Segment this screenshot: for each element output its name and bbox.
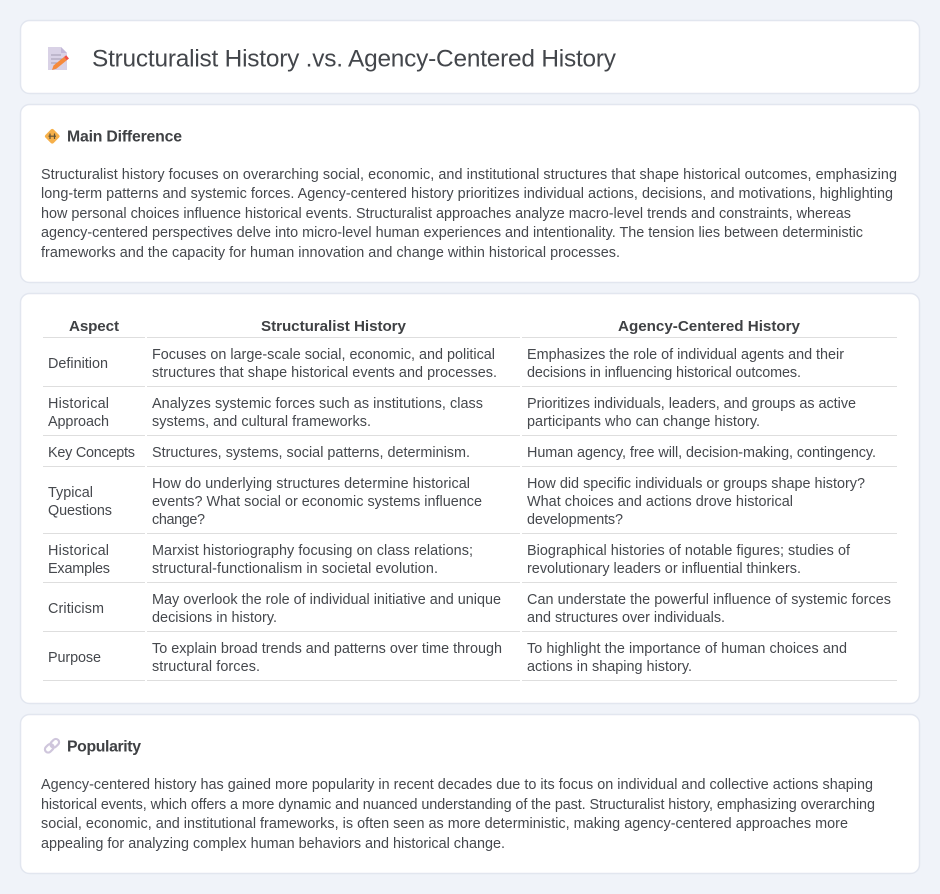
table row: historical examples: Examples xyxy=(48,561,110,577)
table row: historical examples: Biographical histories of notable figures; studies of xyxy=(527,543,851,559)
text block: main difference paragraph: long-term patterns and systemic forces. Agency-centered history prioritizes individual actions, decisions, and motivations, highlighting xyxy=(41,186,893,202)
table row: historical approach xyxy=(43,396,897,436)
table row: criticism: and structures over individuals. xyxy=(527,610,725,626)
text block: popularity paragraph: appealing for analyzing complex human behaviors and historical change. xyxy=(41,836,505,852)
table row: historical approach: Historical xyxy=(48,396,109,412)
table row: historical examples: Historical xyxy=(48,543,109,559)
table row: historical approach: participants who can change history. xyxy=(527,414,760,430)
title: Structuralist History .vs. Agency-Centered History xyxy=(92,46,617,72)
table row: criticism: May overlook the role of individual initiative and unique xyxy=(152,592,501,608)
table row: typical questions: change? xyxy=(152,512,205,528)
table row: purpose: actions in shaping history. xyxy=(527,659,692,675)
table row: definition: structures that shape historical events and processes. xyxy=(152,365,497,381)
table row: historical approach: Prioritizes individuals, leaders, and groups as active xyxy=(527,396,856,412)
table row: typical questions: Questions xyxy=(48,503,112,519)
heading: popularity: Popularity xyxy=(67,738,141,756)
table row: typical questions: How did specific individuals or groups shape history? xyxy=(527,476,865,492)
table row: historical examples: revolutionary leaders or influential thinkers. xyxy=(527,561,801,577)
icon: chain link xyxy=(44,738,60,754)
table row: typical questions xyxy=(43,476,897,534)
table row: historical examples xyxy=(43,543,897,583)
table row: historical examples: Marxist historiography focusing on class relations; xyxy=(152,543,473,559)
text block: main difference paragraph: frameworks and the capacity for human innovation and change within historical processes. xyxy=(41,245,620,261)
table row: key concepts: Human agency, free will, decision-making, contingency. xyxy=(527,445,876,461)
table row: purpose: structural forces. xyxy=(152,659,260,675)
table row: key concepts: Key Concepts xyxy=(48,445,135,461)
table row: criticism: Criticism xyxy=(48,601,104,617)
table row: typical questions: developments? xyxy=(527,512,623,528)
panel: popularity xyxy=(20,714,920,874)
table row: historical approach: Approach xyxy=(48,414,109,430)
table row: historical approach: systems, and cultural frameworks. xyxy=(152,414,371,430)
text block: main difference paragraph xyxy=(41,167,897,261)
table header row xyxy=(43,318,897,338)
table row: typical questions: events? What social or economic systems influence xyxy=(152,494,482,510)
table header row: Agency-Centered History xyxy=(618,318,801,335)
table header row: Aspect xyxy=(69,318,119,335)
text block: main difference paragraph: agency-centered perspectives delve into micro-level human experiences and intentionality. The tension lies between deterministic xyxy=(41,225,863,241)
table row: historical approach: Analyzes systemic forces such as institutions, class xyxy=(152,396,483,412)
panel: title header xyxy=(20,20,920,94)
table row: typical questions: Typical xyxy=(48,485,93,501)
table row: key concepts xyxy=(43,445,897,467)
table row: purpose: To highlight the importance of human choices and xyxy=(527,641,847,657)
text block: main difference paragraph: how personal choices influence historical events. Structuralist approaches analyze macro-level trends and constraints, whereas xyxy=(41,206,851,222)
panel: main difference xyxy=(20,104,920,282)
text block: popularity paragraph: Agency-centered history has gained more popularity in recent decades due to its focus on individual and collective actions shaping xyxy=(41,777,873,793)
panel: comparison table xyxy=(20,294,920,704)
table row: criticism xyxy=(43,592,897,632)
table row: definition: Focuses on large-scale social, economic, and political xyxy=(152,347,495,363)
table row: criticism: Can understate the powerful influence of systemic forces xyxy=(527,592,891,608)
table row: definition: Definition xyxy=(48,356,108,372)
table row: key concepts: Structures, systems, social patterns, determinism. xyxy=(152,445,470,461)
table header row: Structuralist History xyxy=(261,318,407,335)
table row: definition xyxy=(43,347,897,387)
icon: document with pencil xyxy=(48,47,69,70)
heading: main difference: Main Difference xyxy=(67,128,182,146)
table row: purpose xyxy=(43,641,897,681)
table row: purpose: To explain broad trends and patterns over time through xyxy=(152,641,502,657)
table row: historical examples: structural-functionalism in societal evolution. xyxy=(152,561,438,577)
table row: definition: decisions in influencing historical outcomes. xyxy=(527,365,801,381)
text block: popularity paragraph xyxy=(41,777,875,852)
text block: popularity paragraph: social, economic, and institutional frameworks, is often seen as more deterministic, making agency-centered approaches more xyxy=(41,816,848,832)
text block: main difference paragraph: Structuralist history focuses on overarching social, economic, and institutional structures that shape historical outcomes, emphasizing xyxy=(41,167,897,183)
icon: warning diamond xyxy=(44,128,60,144)
table row: criticism: decisions in history. xyxy=(152,610,277,626)
text block: popularity paragraph: historical events, which offers a more dynamic and nuanced understanding of the past. Structuralist history, emphasizing overarching xyxy=(41,797,875,813)
table row: definition: Emphasizes the role of individual agents and their xyxy=(527,347,844,363)
table row: typical questions: What choices and actions drove historical xyxy=(527,494,793,510)
table row: typical questions: How do underlying structures determine historical xyxy=(152,476,470,492)
table row: purpose: Purpose xyxy=(48,650,101,666)
